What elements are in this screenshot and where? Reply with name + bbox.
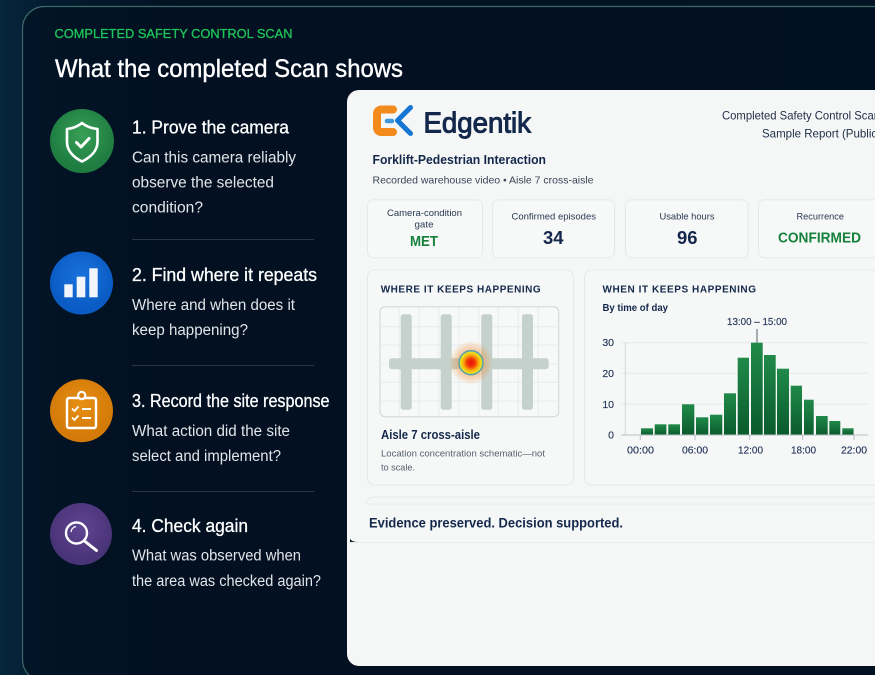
step 2 heading: 2. Find where it repeats [132,265,317,285]
report sheet [347,90,875,666]
step 2 text: keep happening? [132,322,248,339]
step 3 text: What action did the site [132,423,290,440]
report subject: Forklift-Pedestrian Interaction [372,153,546,167]
icon: bars [50,252,113,314]
y axis labels [602,337,614,442]
icon: clipboard [50,379,113,442]
bar chart: by time of day [602,316,868,456]
card: usable hours: Usable hours [660,212,715,222]
peak callout [727,316,787,343]
report header [722,108,875,140]
x axis labels: 22:00 [841,444,867,456]
panel: sample report [347,90,875,666]
report source: Recorded warehouse video • Aisle 7 cross-aisle [372,175,594,187]
step 4 text [132,548,321,590]
step 1 heading: 1. Prove the camera [132,118,290,138]
step 2: find where it repeats [50,252,317,339]
card: camera gate: gate [414,220,434,231]
when heading: WHEN IT KEEPS HAPPENING [602,284,756,295]
step 2 text: Where and when does it [132,297,296,314]
x axis labels: 06:00 [682,444,708,456]
card: recurrence [758,200,875,258]
location note: Location concentration schematic—not [381,449,545,460]
card: recurrence: CONFIRMED [778,230,861,246]
panel: where it keeps happening [368,270,574,485]
where heading: WHERE IT KEEPS HAPPENING [381,284,541,295]
panel: when it keeps happening [584,270,875,485]
chart subtitle: By time of day [602,303,668,314]
heat spot [449,341,493,385]
title: What the completed Scan shows [55,55,403,83]
icon: magnifier [50,503,112,565]
logo mark [377,108,410,134]
y axis labels: 20 [602,368,614,380]
card: camera gate: MET [410,234,438,250]
step 4 text: What was observed when [132,548,301,565]
step 2 text [132,297,296,339]
location name: Aisle 7 cross-aisle [381,428,480,442]
x axis labels [627,444,867,456]
step 1 text [132,150,296,217]
step 3 text [132,423,290,465]
x axis labels: 12:00 [738,444,763,456]
card: confirmed episodes: 34 [543,228,564,248]
x axis labels: 00:00 [627,444,654,456]
card: recurrence: Recurrence [796,212,844,222]
card: usable hours [626,200,748,258]
x axis labels: 18:00 [791,444,816,456]
footer statement: Evidence preserved. Decision supported. [369,516,623,530]
peak callout: 13:00 – 15:00 [727,316,787,328]
step 1 text: Can this camera reliably [132,150,296,167]
card: confirmed episodes [492,200,614,258]
card: camera gate [368,200,482,258]
location note [381,449,545,474]
icon: shield [50,109,114,173]
step 3: record the site response [50,379,330,465]
step 4 heading: 4. Check again [132,516,248,536]
logo wordmark: Edgentik [424,108,531,140]
location schematic [380,307,559,417]
card: usable hours: 96 [677,228,698,248]
step 4 text: the area was checked again? [132,573,321,590]
location note: to scale. [381,463,415,474]
step 1 text: observe the selected [132,175,274,192]
logo [377,108,531,140]
bars [641,343,854,435]
eyebrow: COMPLETED SAFETY CONTROL SCAN [54,27,292,41]
y axis labels: 10 [602,399,614,411]
y axis labels: 0 [608,430,614,442]
y axis labels: 30 [602,337,614,349]
card: confirmed episodes: Confirmed episodes [512,212,596,222]
step 3 heading: 3. Record the site response [132,391,330,411]
step 1 text: condition? [132,200,203,217]
step 1: prove the camera [50,109,296,217]
step 4: check again [50,503,321,590]
card: camera gate: Camera-condition [387,208,462,219]
step 3 text: select and implement? [132,448,281,465]
